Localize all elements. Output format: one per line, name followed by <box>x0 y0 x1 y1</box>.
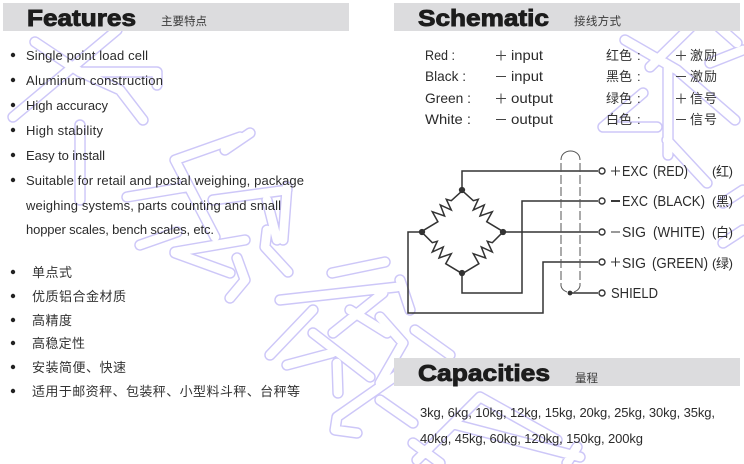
features heading bar: Features <box>27 5 136 31</box>
terminal labels: (GREEN) <box>652 256 708 272</box>
wire colour table: 白色 <box>606 112 632 127</box>
schematic heading bar <box>394 3 740 31</box>
terminal labels: (RED) <box>653 164 688 180</box>
wire colour table: output <box>511 111 553 127</box>
wire colour table: Red : <box>425 47 455 63</box>
resistor bridge <box>420 188 505 275</box>
wire colour table: output <box>511 90 553 106</box>
terminal labels: (绿) <box>712 256 733 271</box>
wire colour table: 绿色 <box>606 91 632 106</box>
terminal labels: (BLACK) <box>653 194 705 210</box>
terminal labels: (白) <box>712 225 733 240</box>
features list: Chinese: 高精度 <box>32 313 72 328</box>
wire colour table: : <box>637 48 641 63</box>
panel: capacities <box>394 358 740 446</box>
schematic heading bar: Schematic <box>418 5 549 31</box>
wire colour table: Green : <box>425 90 471 106</box>
features list: Chinese: 适用于邮资秤、包装秤、小型料斗秤、台秤等 <box>32 384 300 399</box>
features list: English: High stability <box>26 123 104 138</box>
capacities heading bar: Capacities <box>418 360 550 386</box>
wire colour table: 黑色 <box>606 69 632 84</box>
features list: English: Single point load cell <box>26 48 148 63</box>
features list: Chinese: 优质铝合金材质 <box>32 289 126 304</box>
terminal labels <box>611 164 733 302</box>
features heading bar: 主要特点 <box>161 14 207 28</box>
features list: English <box>11 48 304 237</box>
features list: English: weighing systems, parts counting and small <box>25 198 281 213</box>
bridge circuit diagram <box>408 151 605 313</box>
features heading bar <box>3 3 349 31</box>
terminal labels: SHIELD <box>611 286 658 302</box>
wire colour table: 激励 <box>690 69 717 84</box>
capacities heading bar <box>394 358 740 386</box>
wire colour table: 信号 <box>690 91 717 106</box>
capacities values: 40kg, 45kg, 60kg, 120kg, 150kg, 200kg <box>420 431 643 446</box>
terminal labels: SIG <box>622 256 646 272</box>
capacities values: 3kg, 6kg, 10kg, 12kg, 15kg, 20kg, 25kg, 30kg, 35kg, <box>420 405 715 420</box>
wire colour table: Black : <box>425 68 466 84</box>
capacities heading bar: 量程 <box>575 372 598 385</box>
wire colour table <box>425 47 717 127</box>
schematic heading bar: 接线方式 <box>574 14 622 28</box>
panel: features <box>3 3 349 399</box>
dashed shield <box>561 151 580 295</box>
wire colour table: input <box>511 68 543 84</box>
features list: Chinese: 单点式 <box>32 265 72 280</box>
features list: Chinese <box>11 265 300 399</box>
wire colour table: 激励 <box>690 48 717 63</box>
terminal labels: (黑) <box>712 194 733 209</box>
features list: Chinese: 安装简便、快速 <box>32 360 126 375</box>
wire colour table: : <box>637 112 641 127</box>
wire colour table: 红色 <box>606 48 632 63</box>
terminal labels: SIG <box>622 225 646 241</box>
panel: schematic <box>394 3 740 313</box>
features list: English: Easy to install <box>26 148 105 163</box>
features list: English: Suitable for retail and postal weighing, package <box>26 173 304 188</box>
terminal labels: (红) <box>712 164 733 179</box>
wire colour table: input <box>511 47 543 63</box>
wire colour table: White : <box>425 111 471 127</box>
features list: English: High accuracy <box>26 98 108 113</box>
terminal labels: (WHITE) <box>653 225 705 241</box>
features list: English: Aluminum construction <box>26 73 163 88</box>
terminals <box>599 168 605 296</box>
features list: English: hopper scales, bench scales, etc. <box>26 222 214 237</box>
wire colour table: 信号 <box>690 112 717 127</box>
wire colour table: : <box>637 91 641 106</box>
terminal labels: EXC <box>622 194 648 210</box>
wires <box>408 171 598 313</box>
wire colour table: : <box>637 69 641 84</box>
capacities values <box>420 405 715 446</box>
features list: Chinese: 高稳定性 <box>32 336 85 351</box>
terminal labels: EXC <box>622 164 648 180</box>
